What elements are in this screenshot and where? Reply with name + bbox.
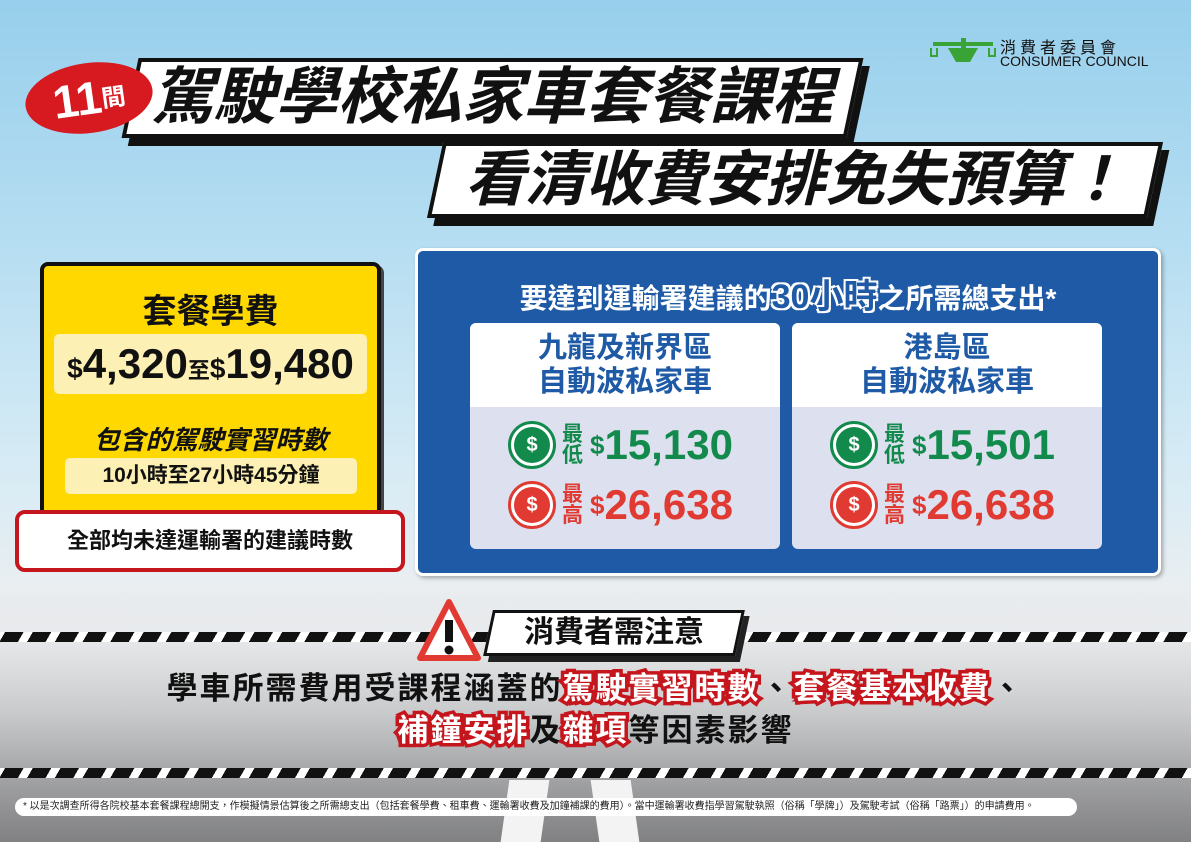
highest: 26,638 [926,481,1055,528]
highest: $ [590,490,604,520]
highest: 最高 [884,483,905,527]
footnote [15,798,1077,816]
card: HK Island [792,323,1102,549]
text: factors: 補鐘安排及雜項等因素影響 [398,713,794,748]
card: HK Island: 自動波私家車 [860,366,1034,398]
highest: $ [912,490,926,520]
hours range [65,458,357,494]
panel: package fee [40,262,381,520]
badge: 11間: 11 [49,71,105,129]
lowest [508,421,733,469]
panel heading: 要達到運輸署建議的30小時之所需總支出* [520,278,1056,316]
callout: below recommended hours [15,510,405,572]
heading: consumer attention: 消費者需注意 [524,616,704,649]
lowest: 最低 [884,423,905,467]
highest [830,481,1055,529]
highest: 26,638 [604,481,733,528]
badge: 11間: 間 [100,83,127,113]
text: factors: 學車所需費用受課程涵蓋的駕駛實習時數、套餐基本收費、 [166,671,1024,706]
title banner 1: 駕駛學校私家車套餐課程 [151,63,834,132]
lowest: 最低 [562,423,583,467]
road background [0,560,1191,842]
lowest: $ [912,430,926,460]
highest [508,481,733,529]
highest: 最高 [562,483,583,527]
lowest: $ [848,434,860,456]
footnote: * 以是次調查所得各院校基本套餐課程總開支，作模擬情景估算後之所需總支出（包括套餐學費、租車費、運輸署收費及加鐘補課的費用）。當中運輸署收費指學習駕駛執照（俗稱「學牌」）及駕駛考試（俗稱「路票」）的申請費用。 [23,801,1035,812]
icon: warning triangle [417,599,481,661]
badge: 11間 [21,54,157,142]
lowest: $ [590,430,604,460]
panel: total expenditure [415,248,1161,576]
logo: consumer council: 消費者委員會 [1000,40,1120,57]
logo: consumer council: CONSUMER COUNCIL [1000,53,1149,69]
hours range: 10小時至27小時45分鐘 [102,464,320,487]
card: HK Island: 港島區 [903,332,990,364]
heading: consumer attention [483,610,745,656]
card: Kowloon & NT: 自動波私家車 [538,366,712,398]
sub heading: 包含的駕駛實習時數 [93,425,328,455]
lowest: $ [526,434,538,456]
logo: consumer council [930,38,1149,69]
heading: 套餐學費: 套餐學費 [142,293,278,331]
lowest: 15,501 [926,421,1055,468]
title banner 2: 看清收費安排免失預算！ [465,146,1125,213]
lowest: 15,130 [604,421,733,468]
callout: below recommended hours: 全部均未達運輸署的建議時數 [67,528,353,553]
highest: $ [848,494,860,516]
card: Kowloon & NT: 九龍及新界區 [538,332,712,364]
card: Kowloon & NT [470,323,780,549]
text: factors [166,668,1024,749]
road line left [501,780,549,842]
highest: $ [526,494,538,516]
lowest [830,421,1055,469]
fee range: $4,320至$19,480 [67,340,354,387]
road line right [591,780,639,842]
